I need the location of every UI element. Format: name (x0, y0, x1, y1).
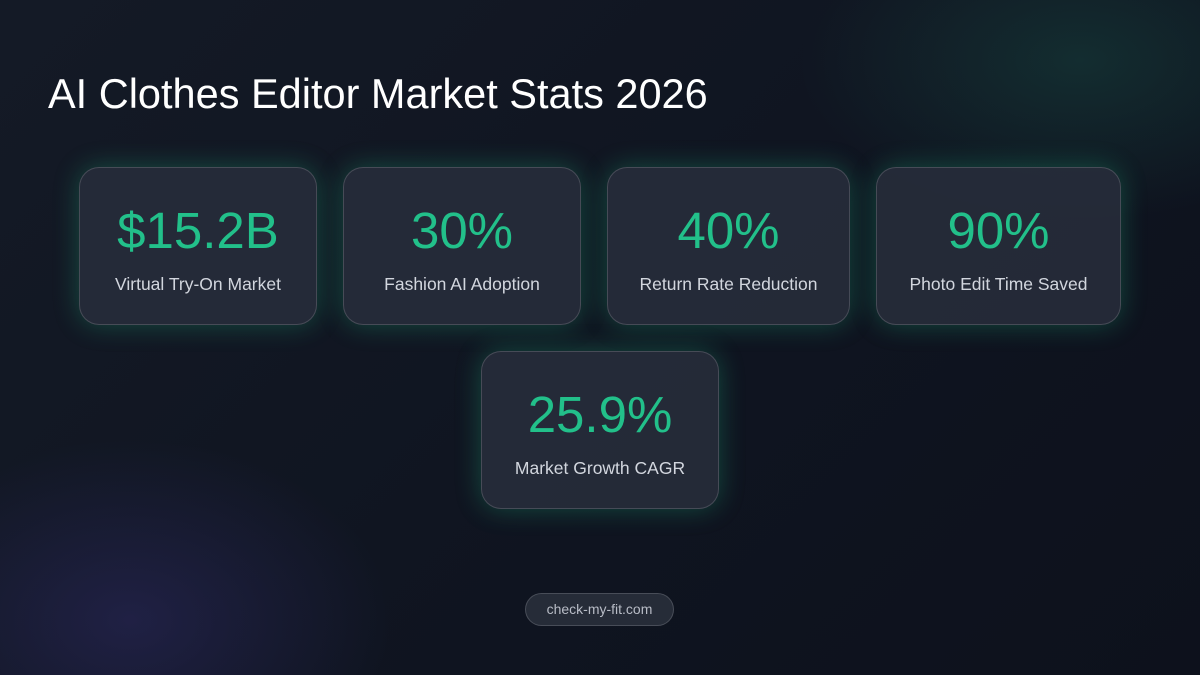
card: fashion ai adoption (343, 167, 581, 325)
card: return rate reduction: 40% (677, 202, 780, 259)
card: fashion ai adoption: Fashion AI Adoption (384, 274, 540, 294)
card: return rate reduction: Return Rate Reduction (639, 274, 818, 294)
card: fashion ai adoption: 30% (411, 202, 513, 259)
footer pill: check-my-fit.com (547, 601, 652, 617)
footer pill (525, 593, 674, 626)
card: virtual try-on market (79, 167, 317, 325)
card: market growth cagr: 25.9% (528, 386, 672, 443)
card: photo edit time saved: Photo Edit Time Saved (909, 274, 1088, 294)
card: virtual try-on market: Virtual Try-On Market (115, 274, 281, 294)
card: return rate reduction (607, 167, 850, 325)
card: market growth cagr: Market Growth CAGR (515, 458, 685, 478)
card: virtual try-on market: $15.2B (117, 202, 279, 259)
title: AI Clothes Editor Market Stats 2026 (48, 70, 708, 117)
card: photo edit time saved (876, 167, 1121, 325)
card: market growth cagr (481, 351, 719, 509)
card: photo edit time saved: 90% (947, 202, 1050, 259)
